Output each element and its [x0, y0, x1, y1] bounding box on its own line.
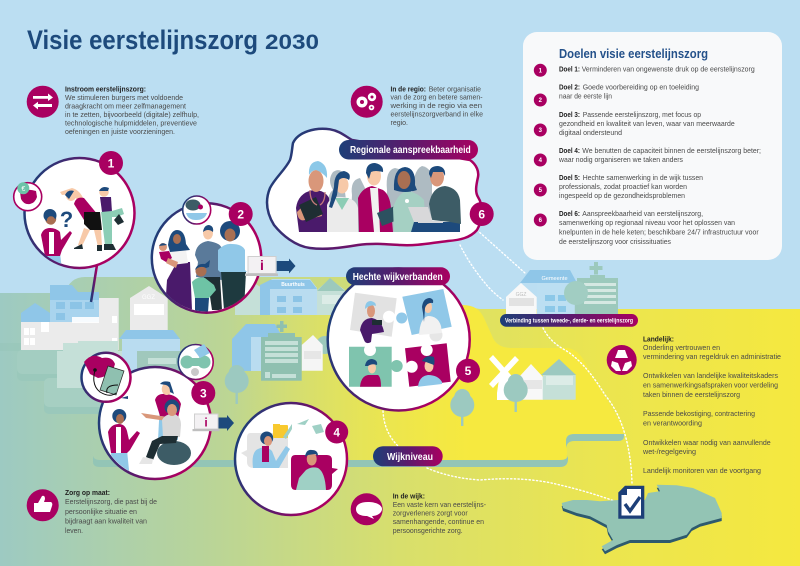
figures: exercising people and woman with question: ?	[60, 207, 73, 232]
panel: Doelen visie eerstelijnszorg	[523, 32, 782, 260]
goal 2: 2	[539, 98, 543, 104]
goal 2: naar de eerste lijn	[559, 92, 612, 100]
goal 4	[534, 146, 761, 166]
goal 3	[534, 110, 735, 137]
figures: group of care professionals	[296, 161, 461, 232]
block: Landelijk: vermindering van regeldruk en administratie	[643, 352, 781, 361]
block: Landelijk: en samenwerkingsafspraken voor verdeling	[643, 380, 778, 390]
heading: doelen: Doelen visie eerstelijnszorg	[559, 46, 708, 61]
goal 5: Doel 5:	[559, 173, 580, 182]
goal 1: 1	[539, 68, 543, 74]
bubble: piggy bank	[14, 182, 42, 211]
label: Hechte wijkverbanden	[346, 267, 450, 285]
block: In de regio: Beter organisatie	[429, 84, 481, 94]
goal 3: Doel 3:	[559, 110, 580, 119]
label: Wijkniveau	[373, 446, 443, 466]
icon: document with checkmark	[618, 486, 644, 519]
block: In de regio: eerstelijnszorgverband in elke	[390, 110, 483, 118]
block: Instroom eerstelijnszorg: Instroom eerstelijnszorg:	[65, 84, 146, 94]
bubble: health insurance with heart and stethoscope	[82, 353, 130, 402]
block: Landelijk: wet-/regelgeving	[642, 447, 696, 456]
icon: arrows	[27, 86, 59, 118]
block: In de regio: In de regio:	[390, 84, 426, 94]
buildings: Gemeente, GGZ and hospital top right: GGZ	[516, 292, 526, 298]
block: In de regio: van de zorg en betere samen-	[390, 92, 483, 102]
figures: video consultation	[241, 419, 338, 490]
icon: info laptop with arrow: i	[260, 257, 264, 273]
goal 3: 3	[539, 128, 543, 134]
badge 5	[456, 359, 480, 383]
block: In de wijk: In de wijk:	[393, 492, 425, 500]
badge 1: 1	[108, 156, 115, 170]
block: Landelijk: Onderling vertrouwen en	[643, 343, 720, 352]
panel: scene 3 zorg op maat	[82, 344, 234, 480]
block: Landelijk: en verantwoording	[643, 418, 702, 428]
goal 3: gezondheid en kwaliteit van leven, waar van meerwaarde	[559, 119, 735, 128]
building: blue clinic	[119, 330, 180, 381]
building: GGZ	[130, 286, 168, 330]
goal 5	[534, 173, 703, 200]
panel: scene 2 burger en gezin	[152, 196, 296, 313]
goal 6: Aanspreekbaarheid van eerstelijnszorg,	[582, 209, 703, 218]
goal 1	[534, 64, 755, 77]
icon: gears	[351, 86, 383, 118]
buildings: windmill and village	[450, 355, 576, 426]
building: Buurthuis row: Buurthuis	[281, 282, 305, 288]
block: In de wijk	[351, 492, 487, 535]
icon: hands holding	[607, 345, 637, 375]
panel: scene 5 hechte wijkverbanden	[328, 267, 480, 410]
label: Hechte wijkverbanden: Hechte wijkverbanden	[353, 272, 443, 283]
buildings: Gemeente, GGZ and hospital top right: Gemeente	[541, 276, 568, 282]
figures: exercising people and woman with question	[41, 187, 124, 270]
building: central hospital, house and trees	[225, 321, 334, 404]
goal 5: professionals, zodat proactief kan worden	[559, 182, 687, 191]
panel: scene 4 in de wijk	[235, 403, 348, 515]
building: Buurthuis row	[235, 278, 345, 315]
badge 4: 4	[333, 427, 340, 439]
block: Zorg op maat	[27, 488, 157, 535]
block: Instroom eerstelijnszorg: oefeningen en juiste voorzieningen.	[65, 127, 175, 136]
bubble: medicine	[178, 344, 213, 380]
badge 5: 5	[465, 364, 472, 378]
badge 1	[99, 151, 123, 175]
bright yellow neighbourhood hill	[230, 300, 624, 460]
block: Instroom eerstelijnszorg: in te zetten, bijvoorbeeld (digitale) zelfhulp,	[65, 110, 199, 119]
block: In de wijk: Een vaste kern van eerstelijns-	[393, 500, 487, 509]
building: GGZ: GGZ	[142, 295, 155, 301]
panel: scene 1 instroom	[14, 151, 135, 302]
block: In de regio: werking in de regio via een	[389, 101, 482, 110]
block: Landelijk: taken binnen de eerstelijnszorg	[643, 390, 740, 399]
block: Landelijk	[607, 334, 781, 475]
bubble: healthy food	[183, 196, 211, 224]
label: Wijkniveau: Wijkniveau	[387, 452, 433, 463]
goal 6: knelpunten in de hele keten; beschikbare 24/7 infrastructuur voor	[559, 228, 759, 236]
buildings: Gemeente, GGZ and hospital top right	[506, 262, 618, 314]
badge 3: 3	[200, 386, 207, 400]
goal 6: Doel 6:	[559, 209, 580, 218]
goal 5: Hechte samenwerking in de wijk tussen	[583, 173, 703, 182]
label: Regionale aanspreekbaarheid	[339, 140, 478, 160]
block: Zorg op maat: bijdraagt aan kwaliteit van	[65, 516, 147, 525]
goal 4: Doel 4:	[559, 146, 580, 155]
goal 6: de eerstelijnszorg voor crisissituaties	[559, 237, 671, 246]
connector: dotted routes	[383, 230, 632, 503]
map: Netherlands	[562, 485, 722, 554]
figures: therapist, patient and woman	[108, 381, 191, 480]
badge 3	[191, 381, 215, 405]
goal 5: 5	[539, 188, 543, 194]
block: Zorg op maat: persoonlijke situatie en	[65, 507, 137, 516]
block: Zorg op maat: leven.	[65, 526, 83, 535]
ground landscape	[0, 277, 800, 566]
badge 2	[229, 202, 253, 226]
icon: thumbs up	[27, 489, 59, 521]
block: Instroom eerstelijnszorg	[27, 84, 199, 136]
goal 3: Passende eerstelijnszorg, met focus op	[583, 110, 701, 119]
badge 2: 2	[237, 208, 244, 222]
goal 4: waar nodig organiseren we taken anders	[558, 155, 683, 164]
goal 2: Doel 2:	[559, 82, 580, 92]
block: In de regio: regio.	[390, 118, 408, 127]
icon: info laptop with arrow	[245, 256, 296, 276]
block: In de wijk: persoonsgerichte zorg.	[393, 526, 463, 535]
puzzle pieces with care professionals	[349, 289, 452, 387]
goal 4: We benutten de capaciteit binnen de eerstelijnszorg beter;	[582, 146, 761, 155]
goal 1: Doel 1:	[559, 64, 580, 74]
block: Zorg op maat: Zorg op maat:	[65, 488, 110, 497]
block: Landelijk: Landelijk monitoren van de voortgang	[643, 466, 761, 475]
bubble: piggy bank: €	[21, 186, 25, 193]
icon: speech bubble	[351, 493, 383, 525]
block: Landelijk: Landelijk:	[643, 334, 674, 344]
badge 6: 6	[478, 208, 485, 222]
block: Landelijk: Ontwikkelen waar nodig van aanvullende	[643, 438, 771, 447]
block: Landelijk: Passende bekostiging, contractering	[643, 409, 755, 418]
label: Verbinding tussen tweede-, derde- en eerstelijnszorg	[500, 314, 638, 327]
goal 6: samenwerking op regionaal niveau voor het oplossen van	[559, 218, 735, 227]
block: Zorg op maat: Eerstelijnszorg, die past bij de	[65, 497, 157, 506]
panel: scene 6 regionale aanspreekbaarheid	[267, 129, 494, 249]
block: Landelijk: Ontwikkelen van landelijke kwaliteitskaders	[643, 371, 778, 380]
icon: info laptop with arrow: i	[204, 416, 208, 430]
title: 2030	[265, 31, 319, 54]
block: Instroom eerstelijnszorg: draagkracht om meer zelfmanagement	[65, 101, 186, 110]
goal 2: Goede voorbereiding op en toeleiding	[583, 82, 699, 92]
goal 2	[534, 82, 699, 106]
badge 6	[470, 202, 494, 226]
block: In de regio	[351, 84, 483, 127]
block: Instroom eerstelijnszorg: technologische hulpmiddelen, preventieve	[65, 118, 197, 127]
goal 5: ingespeeld op de gezondheidsproblemen	[559, 191, 685, 200]
figures: family	[159, 221, 247, 312]
buildings: left hospital cluster	[17, 285, 125, 414]
goal 4: 4	[539, 158, 543, 164]
goal 3: digitaal ondersteund	[559, 128, 622, 137]
goal 6: 6	[539, 218, 543, 224]
title: Visie eerstelijnszorg	[27, 25, 258, 55]
label: Verbinding tussen tweede-, derde- en eerstelijnszorg: Verbinding tussen tweede-, derde- en eerstelijnszorg	[505, 318, 633, 324]
goal 1: Verminderen van ongewenste druk op de eerstelijnszorg	[582, 64, 755, 74]
block: In de wijk: zorgverleners zorgt voor	[393, 508, 468, 518]
icon: info laptop with arrow	[192, 414, 234, 431]
block: In de wijk: samenhangende, continue en	[393, 517, 484, 526]
label: Regionale aanspreekbaarheid: Regionale aanspreekbaarheid	[350, 145, 471, 156]
goal 6	[534, 209, 759, 246]
road band	[93, 434, 624, 467]
block: Instroom eerstelijnszorg: We stimuleren burgers met voldoende	[65, 93, 183, 102]
